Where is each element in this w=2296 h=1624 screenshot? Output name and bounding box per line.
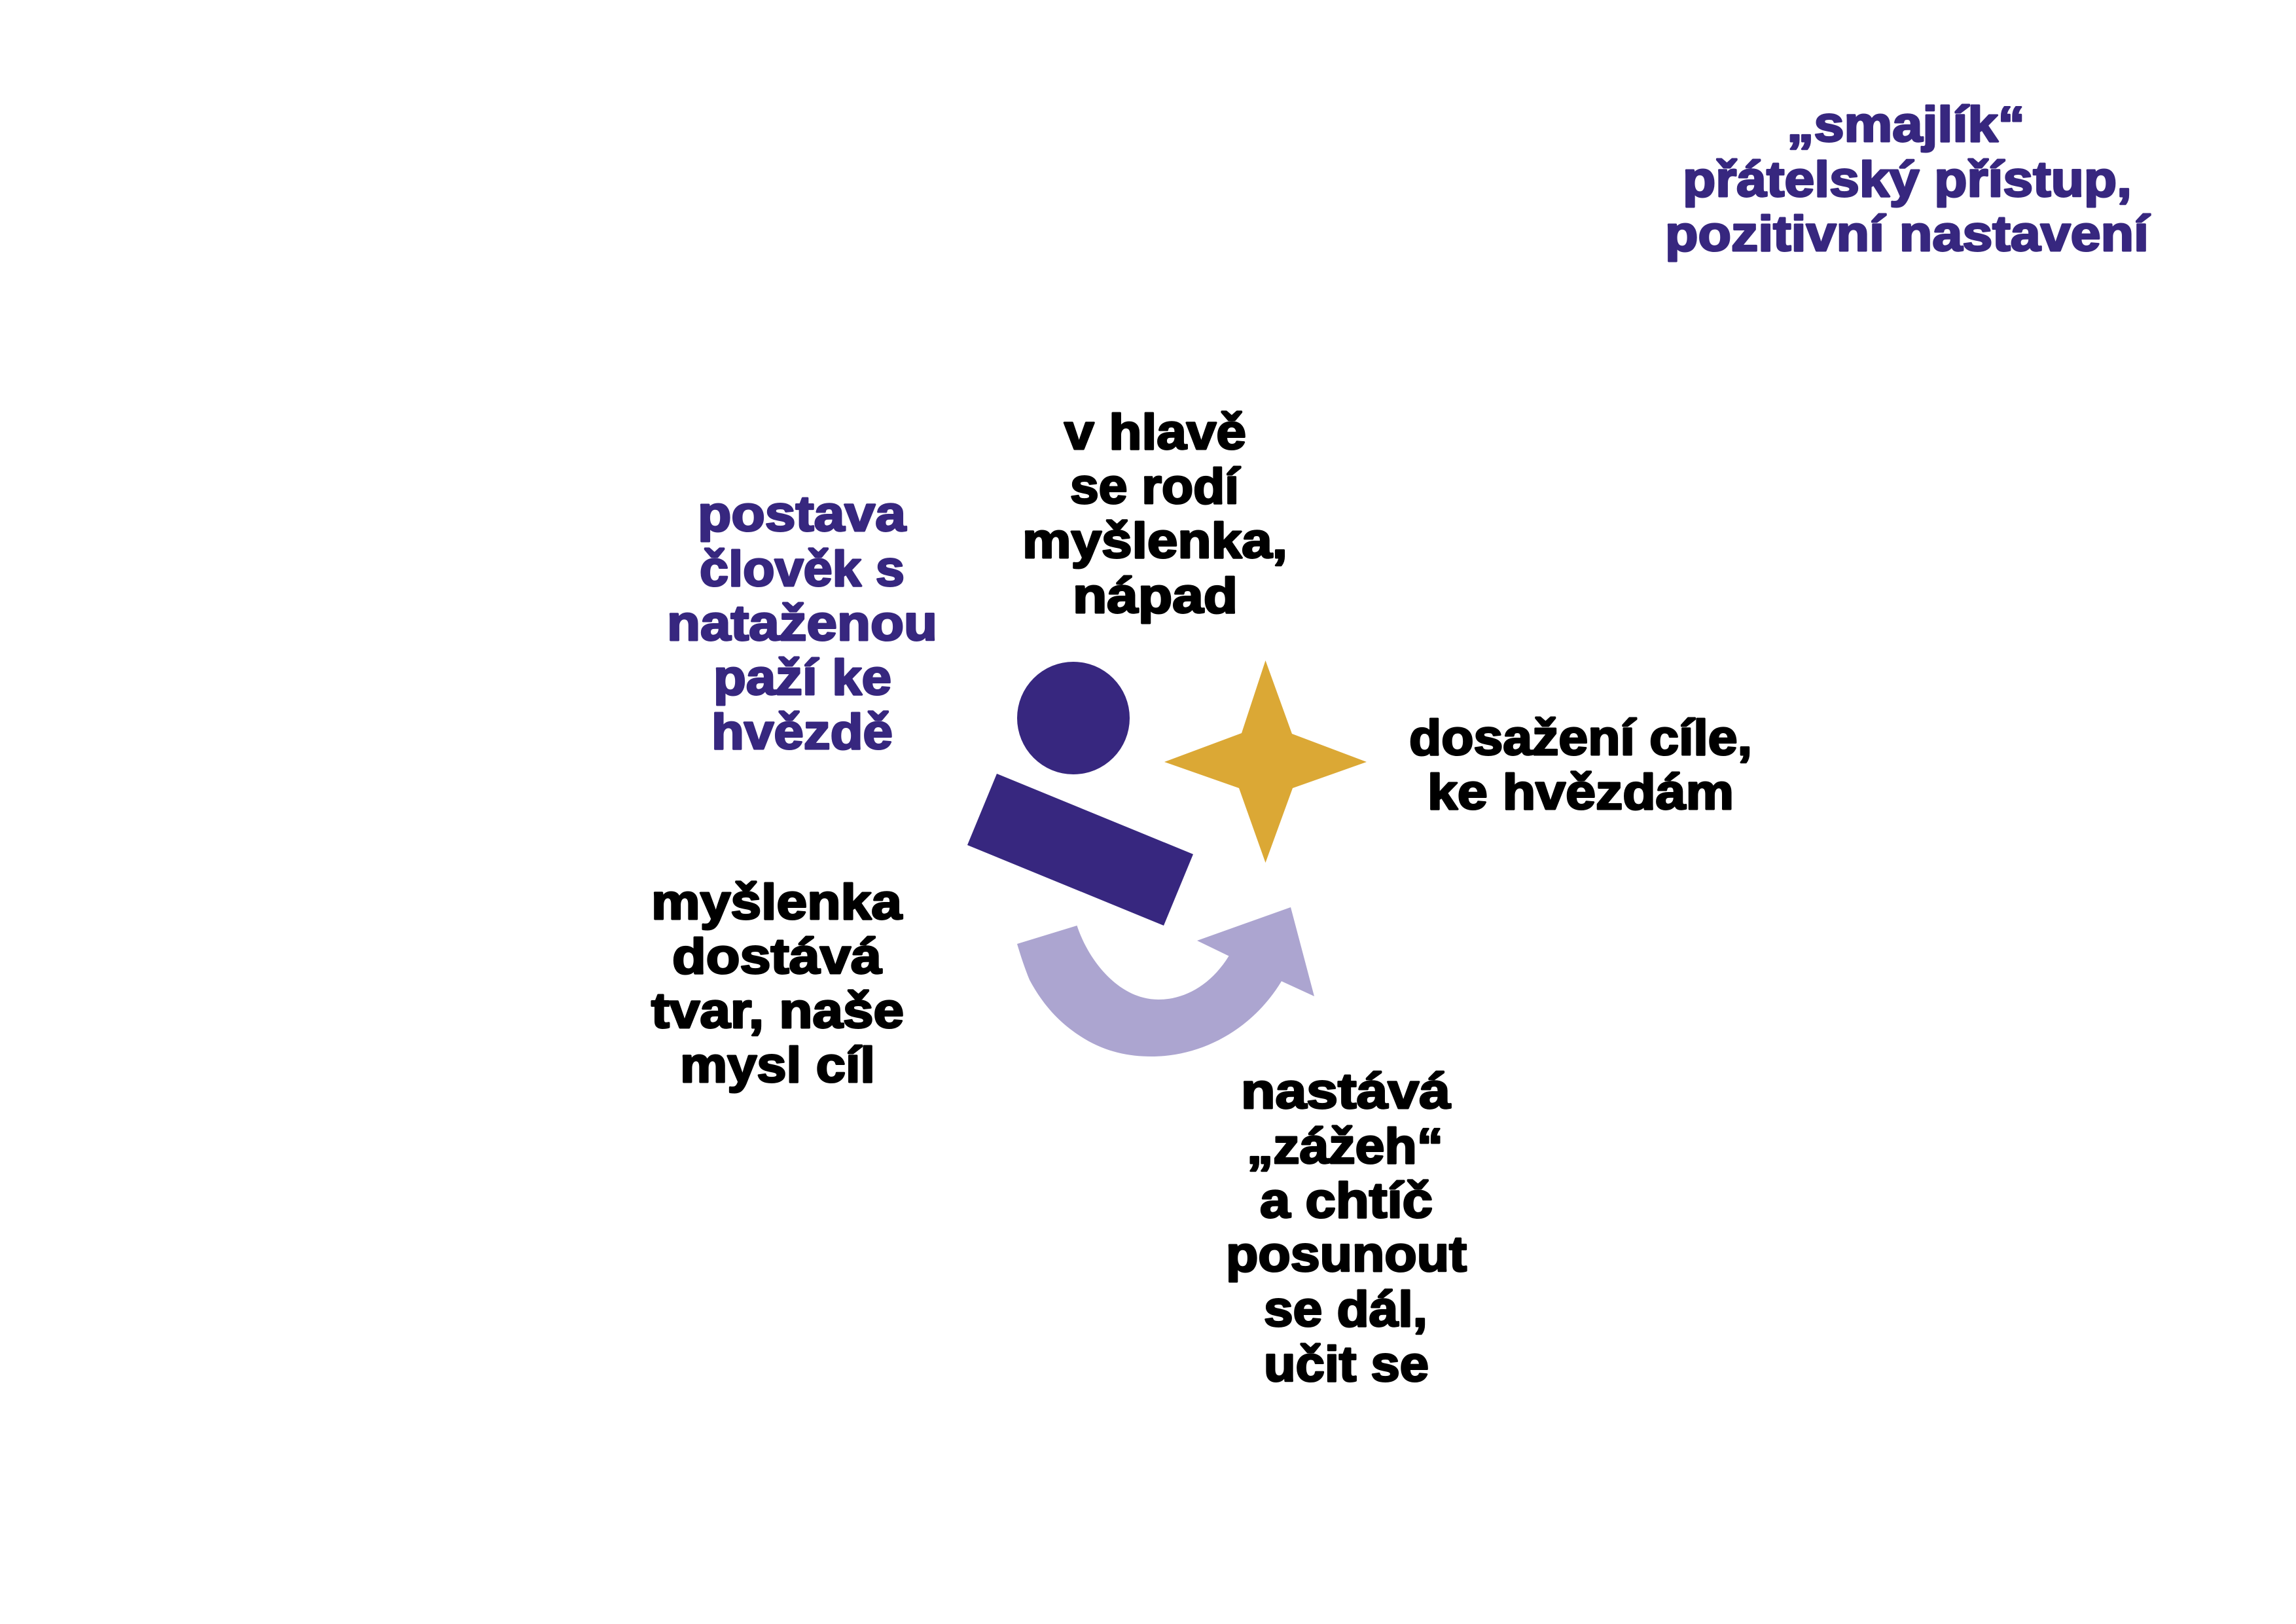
icon: figure body (967, 774, 1193, 926)
text block: ignition and drive to learn: se dál, (1264, 1282, 1427, 1337)
text block: smiley meaning: pozitivní nastavení (1665, 206, 2151, 262)
text block: idea in the head (1022, 405, 1287, 624)
text block: ignition and drive to learn: učit se (1264, 1337, 1429, 1392)
text block: smiley meaning (1665, 97, 2151, 262)
icon: figure head (1017, 662, 1130, 774)
text block: thought takes shape: mysl cíl (680, 1038, 875, 1093)
text block: ignition and drive to learn: „zážeh“ (1247, 1119, 1443, 1174)
text block: figure meaning: postava (698, 486, 906, 542)
text block: figure meaning: hvězdě (711, 704, 893, 760)
text block: idea in the head: myšlenka, (1022, 513, 1287, 569)
text block: thought takes shape: tvar, naše (651, 983, 904, 1039)
text block: idea in the head: se rodí (1070, 459, 1241, 514)
text block: idea in the head: v hlavě (1064, 405, 1246, 460)
text block: figure meaning: paží ke (713, 650, 891, 706)
text block: figure meaning: člověk s (700, 541, 905, 597)
text block: idea in the head: nápad (1073, 568, 1238, 624)
text block: smiley meaning: „smajlík“ (1787, 97, 2025, 153)
text block: ignition and drive to learn: nastává (1241, 1064, 1451, 1119)
text block: ignition and drive to learn: posunout (1226, 1227, 1467, 1282)
text block: reaching the goal: dosažení cíle, (1409, 710, 1752, 766)
text block: thought takes shape (651, 875, 904, 1093)
icon: four-pointed star (1164, 660, 1367, 863)
text block: reaching the goal: ke hvězdám (1427, 765, 1734, 820)
text block: figure meaning: nataženou (667, 596, 937, 651)
arrow: curved smile arrow (1017, 907, 1314, 1056)
text block: thought takes shape: dostává (672, 929, 882, 984)
text block: smiley meaning: přátelský přístup, (1683, 152, 2132, 208)
text block: reaching the goal (1409, 710, 1752, 820)
text block: ignition and drive to learn: a chtíč (1260, 1173, 1433, 1229)
text block: thought takes shape: myšlenka (651, 875, 903, 930)
text block: figure meaning (667, 486, 937, 760)
text block: ignition and drive to learn (1226, 1064, 1467, 1392)
